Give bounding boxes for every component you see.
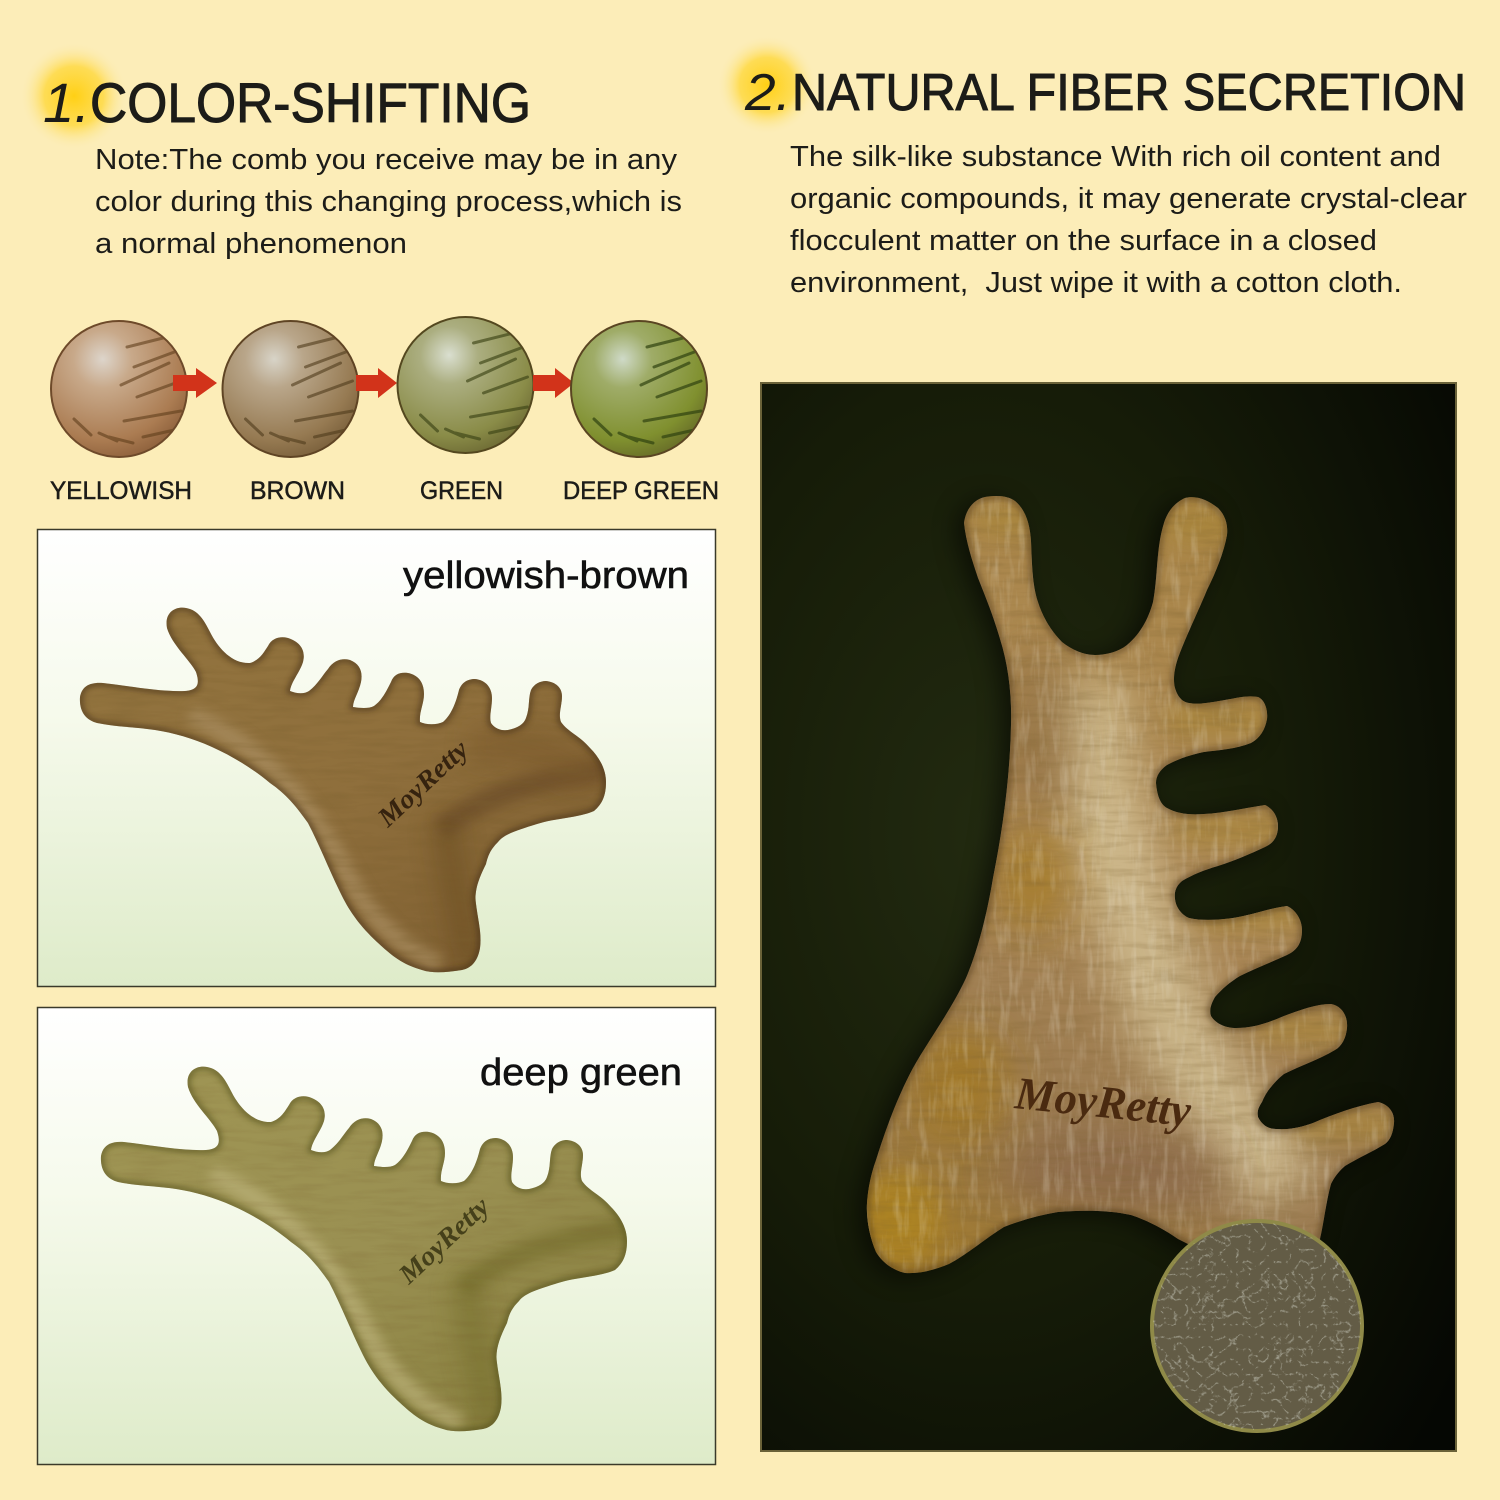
comb: yellowish-brown [80, 608, 606, 972]
heading 2: natural fiber secretion [717, 35, 1466, 135]
text block: fiber secretion description: organic compounds, it may generate crystal-clear [790, 183, 1467, 215]
panel: deep green comb [38, 1008, 716, 1464]
arrow: yellowish to brown [173, 368, 217, 398]
swatch labels [50, 477, 719, 505]
comb: deep green [100, 1066, 627, 1432]
panel: fiber secretion photo [761, 383, 1456, 1451]
label: deep green: deep green [480, 1052, 682, 1094]
swatch: yellowish [51, 321, 187, 457]
color progression swatches [51, 317, 707, 457]
arrow: green to deep green [533, 368, 574, 398]
swatch labels: BROWN [250, 477, 345, 505]
comb: large with fiber secretion [850, 480, 1410, 1290]
heading 1: color-shifting: COLOR-SHIFTING [90, 71, 531, 134]
text block: color note: a normal phenomenon [95, 228, 407, 260]
arrow: brown to green [356, 368, 397, 398]
swatch labels: DEEP GREEN [563, 477, 719, 505]
text block: color note: color during this changing process,which is [95, 186, 682, 218]
text block: fiber secretion description: flocculent matter on the surface in a closed [790, 225, 1377, 257]
swatch: green [398, 317, 534, 453]
heading 1: color-shifting [20, 42, 531, 150]
text block: fiber secretion description: environment, Just wipe it with a cotton cloth. [790, 267, 1402, 299]
swatch: brown [222, 321, 358, 457]
icon: yellow glow behind number 1 [20, 42, 128, 150]
text block: fiber secretion description: The silk-like substance With rich oil content and [790, 141, 1441, 173]
icon: yellow glow behind number 2 [717, 35, 817, 135]
swatch labels: YELLOWISH [50, 477, 192, 505]
text block: fiber secretion description [790, 141, 1467, 299]
panel: yellowish-brown comb [38, 530, 716, 990]
logo: MoyRetty: MoyRetty [392, 1190, 496, 1290]
logo: MoyRetty: MoyRetty [1012, 1067, 1194, 1136]
label: yellowish-brown: yellowish-brown [403, 555, 689, 597]
heading 1: color-shifting: 1. [43, 71, 90, 134]
text block: color note [95, 144, 682, 260]
swatch: deep green [571, 321, 707, 457]
heading 2: natural fiber secretion: NATURAL FIBER SECRETION [792, 64, 1466, 122]
heading 2: natural fiber secretion: 2. [744, 64, 791, 122]
inset: fiber close-up [1150, 1220, 1364, 1432]
logo: MoyRetty: MoyRetty [371, 733, 475, 833]
swatch labels: GREEN [420, 477, 503, 505]
text block: color note: Note:The comb you receive may be in any [95, 144, 678, 176]
